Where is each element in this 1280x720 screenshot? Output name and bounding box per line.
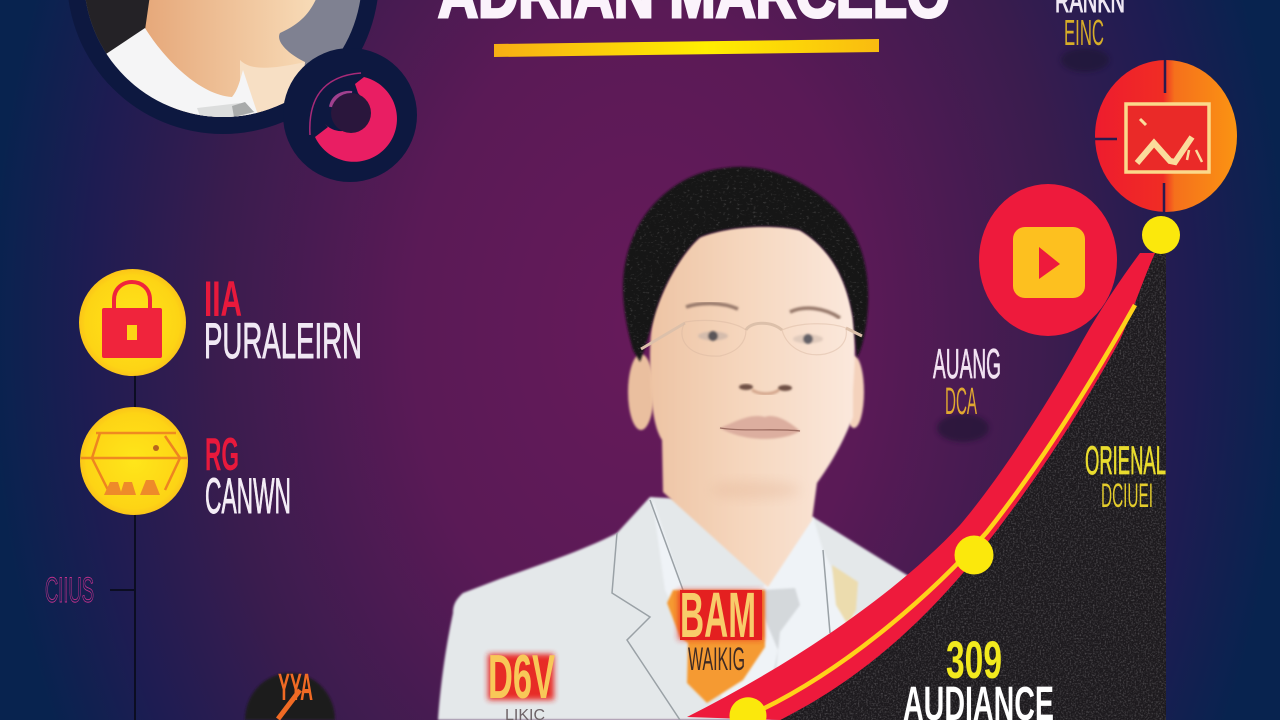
top-left portrait badge [67,0,379,134]
table step: icon and label [80,407,291,524]
lock step: icon and label [79,269,362,376]
icon: play button [979,184,1117,336]
mid label near play icon [933,340,1001,442]
bottom-left dark blob with label [245,667,335,720]
mouth [720,416,800,439]
orange tag with BAM label [667,579,765,703]
mid label near play icon: DCA [945,381,977,423]
nose [739,384,792,394]
orange tag with BAM label: WAIKIG [688,641,745,677]
tie [762,588,800,700]
audience stat: 309 [946,631,1002,690]
timeline tick label: CIIUS [45,571,94,610]
label: table step [205,428,291,524]
central portrait [438,160,930,720]
label on dark area: DCIUEI [1101,477,1153,515]
icon: chart in segmented circle [1095,60,1237,212]
small navy badge with pink donut [283,48,417,182]
hair [623,167,868,362]
eyes [698,331,823,344]
label on dark area [1085,439,1166,515]
curve node top [1142,216,1180,254]
shirt and collar [652,497,857,720]
orange tag with BAM label: BAM [680,579,756,651]
text: CANWN [205,468,291,524]
text: AUANG [933,340,1001,387]
timeline line [110,375,135,720]
curve node bottom [730,697,766,720]
chin shadow [710,481,800,499]
top-right label: EINC [1064,12,1104,53]
audience stat [903,631,1054,720]
bottom-left dark blob with label: YYA [278,667,313,709]
glasses [641,320,862,356]
eyebrows [686,303,840,318]
title underline bar [494,39,879,57]
label: lock step: IIA [204,271,242,327]
label: lock step [204,271,362,369]
icon: table [80,407,188,515]
suit [438,497,930,720]
lapel pin [832,565,858,625]
label: table step: RG [205,428,239,480]
curve centre line [748,305,1135,716]
curve node middle [954,536,994,574]
dark area under growth curve [770,250,1170,720]
lapel lines [612,500,830,720]
icon: lock [79,269,186,376]
D6V label [488,643,555,720]
face and neck [650,226,855,587]
ears [628,354,654,430]
D6V label: D6V [488,643,555,712]
top-right label [1055,0,1125,72]
label: lock step: PURALEIRN [204,313,362,369]
text: ORIENAL [1085,439,1166,483]
growth curve ribbon [687,253,1155,720]
